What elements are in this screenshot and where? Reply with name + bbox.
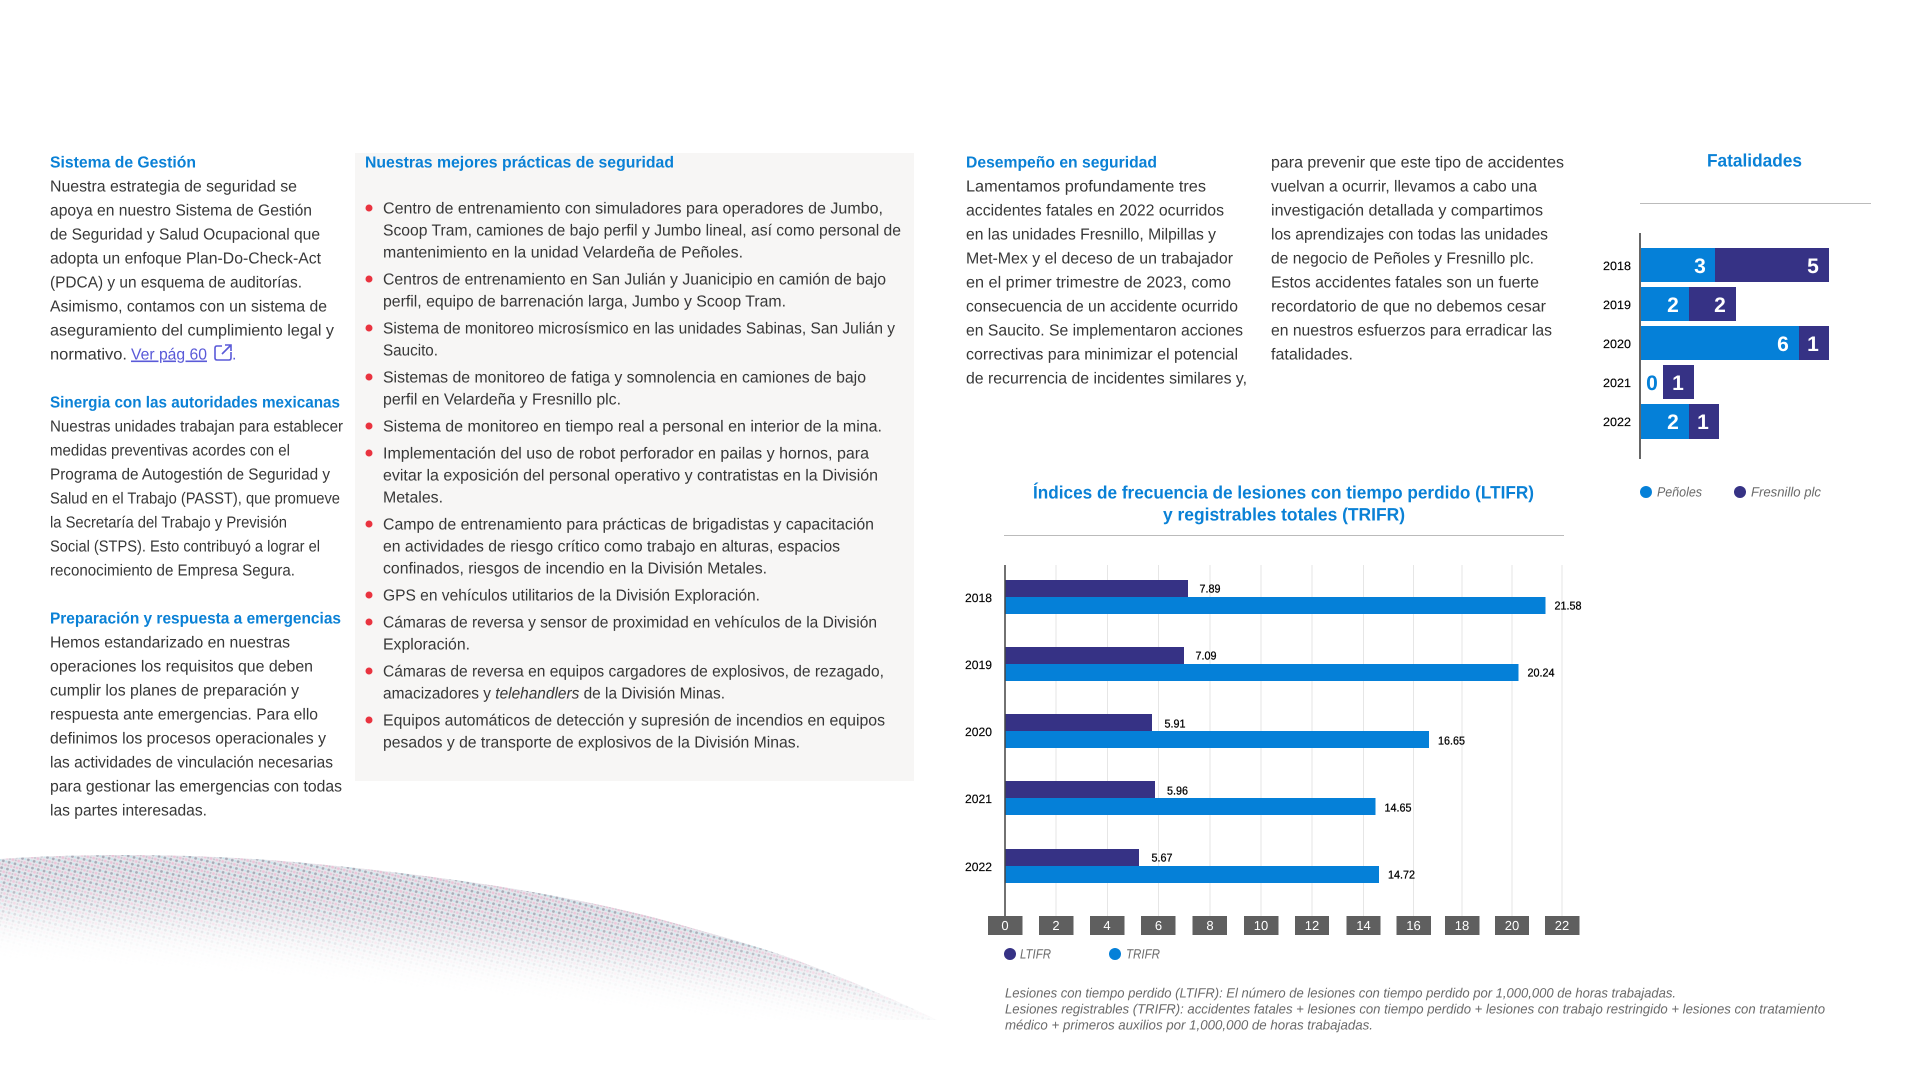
- legend: TRIFR: [1109, 947, 1160, 962]
- x axis tick boxes: 14: [1356, 918, 1371, 933]
- text block: Preparación y respuesta a emergencias: definimos los procesos operacionales y: [50, 730, 326, 748]
- bars 2022: [965, 849, 1415, 883]
- heading: Desempeño en seguridad: Desempeño en seguridad: [966, 154, 1157, 172]
- panel: best practices background: [355, 153, 914, 781]
- text block: Desempeño continuation: investigación detallada y compartimos: [1271, 202, 1543, 220]
- list item 6: evitar la exposición del personal operativo y contratistas en la División: [383, 468, 878, 484]
- text block: Sistema de Gestión: apoya en nuestro Sistema de Gestión: [50, 202, 312, 220]
- icon: external link: [215, 345, 231, 360]
- bars 2020: 5.91: [1164, 718, 1186, 730]
- row 2022: 2: [1667, 411, 1679, 434]
- bars 2019: 7.09: [1196, 650, 1216, 662]
- text block: Desempeño en seguridad: en el primer trimestre de 2023, como: [966, 274, 1231, 292]
- row 2019: [1603, 287, 1736, 321]
- bars 2021: 2021: [965, 792, 992, 806]
- legend: TRIFR: TRIFR: [1126, 947, 1160, 962]
- text block: Sistema de Gestión: [50, 154, 334, 364]
- chart title: [1033, 482, 1534, 524]
- text block: Desempeño en seguridad: consecuencia de un accidente ocurrido: [966, 298, 1238, 316]
- x axis tick boxes: 22: [1555, 918, 1569, 933]
- bars 2020: 16.65: [1438, 736, 1465, 748]
- bars 2018: [965, 580, 1582, 614]
- list item 1: Scoop Tram, camiones de bajo perfil y Jumbo lineal, así como personal de: [383, 222, 901, 240]
- legend: LTIFR: [1004, 947, 1051, 962]
- bars 2019: [965, 647, 1555, 681]
- row 2020: 6: [1777, 333, 1789, 356]
- x axis tick boxes: 6: [1155, 918, 1162, 933]
- row 2021: 1: [1672, 372, 1684, 395]
- list item 6: Implementación del uso de robot perforador en pailas y hornos, para: [383, 446, 869, 462]
- x axis tick boxes: 16: [1406, 918, 1421, 933]
- text block: Sinergia con las autoridades mexicanas: reconocimiento de Empresa Segura.: [50, 562, 295, 580]
- x axis tick boxes: 18: [1455, 918, 1469, 933]
- text block: Sinergia con las autoridades mexicanas: [50, 394, 344, 580]
- text block: Preparación y respuesta a emergencias: respuesta ante emergencias. Para ello: [50, 706, 318, 724]
- text block: Sistema de Gestión: normativo.: [50, 346, 127, 364]
- bars 2019: 2019: [965, 658, 992, 672]
- row 2018: 5: [1807, 255, 1819, 278]
- text block: Desempeño continuation: [1271, 154, 1564, 364]
- list item 10: Cámaras de reversa en equipos cargadores de explosivos, de rezagado,: [383, 664, 884, 680]
- text block: Sinergia con las autoridades mexicanas: Social (STPS). Esto contribuyó a lograr el: [50, 538, 320, 556]
- link: Ver pág 60: Ver pág 60: [131, 346, 207, 364]
- bars 2018: 7.89: [1200, 584, 1220, 596]
- row 2020: [1603, 326, 1829, 360]
- bullet list: best practices: [366, 200, 901, 752]
- text block: Sinergia con las autoridades mexicanas: Salud en el Trabajo (PASST), que promueve: [50, 490, 340, 508]
- bars 2022: 5.67: [1152, 852, 1172, 864]
- row 2021: 0: [1646, 372, 1658, 395]
- heading: Sinergia: Sinergia con las autoridades mexicanas: [50, 394, 340, 412]
- list item 11: Equipos automáticos de detección y supresión de incendios en equipos: [383, 712, 885, 730]
- bars 2021: 14.65: [1384, 802, 1412, 814]
- x axis tick boxes: 20: [1505, 918, 1519, 933]
- text block: Desempeño continuation: de negocio de Peñoles y Fresnillo plc.: [1271, 250, 1534, 268]
- bars 2020: 2020: [965, 725, 992, 739]
- bars 2021: 5.96: [1167, 786, 1188, 798]
- list item 7: Campo de entrenamiento para prácticas de brigadistas y capacitación: [383, 516, 874, 534]
- text block: Sistema de Gestión: Nuestra estrategia de seguridad se: [50, 178, 297, 196]
- text block: Desempeño continuation: los aprendizajes con todas las unidades: [1271, 226, 1548, 244]
- chart title: Fatalidades: Fatalidades: [1707, 150, 1802, 170]
- row 2018: 2018: [1603, 259, 1631, 273]
- list item 5: Sistema de monitoreo en tiempo real a personal en interior de la mina.: [383, 418, 882, 436]
- text block: Sistema de Gestión: adopta un enfoque Plan-Do-Check-Act: [50, 250, 322, 268]
- row 2020: 1: [1807, 333, 1819, 356]
- row 2018: [1603, 248, 1829, 282]
- legend: Peñoles: Peñoles: [1657, 485, 1702, 500]
- list item 2: [366, 272, 886, 310]
- row 2019: 2: [1714, 294, 1726, 317]
- list item 1: Centro de entrenamiento con simuladores para operadores de Jumbo,: [383, 200, 883, 218]
- text block: Desempeño en seguridad: en las unidades Fresnillo, Milpillas y: [966, 226, 1216, 244]
- text block: Sinergia con las autoridades mexicanas: Programa de Autogestión de Seguridad y: [50, 466, 330, 484]
- x axis tick boxes: 12: [1305, 918, 1319, 933]
- text block: Desempeño en seguridad: de recurrencia de incidentes similares y,: [966, 370, 1247, 388]
- text block: Sistema de Gestión: .: [232, 346, 236, 364]
- row 2022: 2022: [1603, 415, 1631, 429]
- list item 4: Sistemas de monitoreo de fatiga y somnolencia en camiones de bajo: [383, 370, 866, 386]
- row 2021: [1603, 365, 1694, 399]
- legend: Fresnillo plc: Fresnillo plc: [1751, 485, 1821, 500]
- x axis tick boxes: 8: [1206, 918, 1214, 933]
- chart title: y registrables totales (TRIFR): [1163, 504, 1405, 524]
- text block: Sistema de Gestión: Asimismo, contamos con un sistema de: [50, 298, 327, 316]
- text block: Sinergia con las autoridades mexicanas: Nuestras unidades trabajan para establecer: [50, 418, 344, 436]
- bars 2022: 2022: [965, 860, 992, 874]
- text block: Desempeño continuation: en nuestros esfuerzos para erradicar las: [1271, 322, 1552, 340]
- bars 2021: [965, 781, 1412, 815]
- text block: Preparación y respuesta a emergencias: operaciones los requisitos que deben: [50, 658, 313, 676]
- list item 7: en actividades de riesgo crítico como trabajo en alturas, espacios: [383, 538, 840, 556]
- text block: Desempeño continuation: Estos accidentes fatales son un fuerte: [1271, 274, 1539, 292]
- list item 2: perfil, equipo de barrenación larga, Jumbo y Scoop Tram.: [383, 294, 786, 310]
- bars 2018: 21.58: [1554, 600, 1582, 612]
- footnote: [1005, 986, 1825, 1033]
- text block: Desempeño en seguridad: [966, 154, 1247, 388]
- text block: Sinergia con las autoridades mexicanas: medidas preventivas acordes con el: [50, 442, 290, 460]
- chart title: Índices de frecuencia de lesiones con tiempo perdido (LTIFR): [1033, 482, 1534, 502]
- text block: Preparación y respuesta a emergencias: cumplir los planes de preparación y: [50, 682, 299, 700]
- text block: Preparación y respuesta a emergencias: para gestionar las emergencias con todas: [50, 778, 342, 796]
- decorative halftone swoosh: [0, 855, 930, 1020]
- row 2020: 2020: [1603, 337, 1631, 351]
- list item 6: [366, 446, 878, 506]
- footnote: Lesiones con tiempo perdido (LTIFR): El número de lesiones con tiempo perdido por 1,000,000 de horas trabajadas.: [1005, 986, 1676, 1001]
- row 2022: [1603, 404, 1719, 439]
- text block: Desempeño continuation: para prevenir que este tipo de accidentes: [1271, 154, 1564, 172]
- x axis tick boxes: [988, 916, 1580, 935]
- list item 4: perfil en Velardeña y Fresnillo plc.: [383, 392, 621, 408]
- text block: Sistema de Gestión: aseguramiento del cumplimiento legal y: [50, 322, 334, 340]
- row 2019: 2019: [1603, 298, 1631, 312]
- text block: Sistema de Gestión: (PDCA) y un esquema de auditorías.: [50, 274, 302, 292]
- list item 4: [366, 370, 866, 408]
- list item 3: [366, 320, 895, 360]
- list item 3: Sistema de monitoreo microsísmico en las unidades Sabinas, San Julián y: [383, 320, 895, 338]
- text block: Preparación y respuesta a emergencias: [50, 610, 342, 820]
- text block: Desempeño continuation: recordatorio de que no debemos cesar: [1271, 298, 1547, 316]
- bars 2019: 20.24: [1528, 668, 1555, 680]
- text block: Sinergia con las autoridades mexicanas: la Secretaría del Trabajo y Previsión: [50, 514, 287, 532]
- text block: Desempeño continuation: vuelvan a ocurrir, llevamos a cabo una: [1271, 178, 1537, 196]
- legend: Peñoles: [1640, 485, 1702, 500]
- footnote: Lesiones registrables (TRIFR): accidentes fatales + lesiones con tiempo perdido + lesiones con trabajo restringido + lesiones con tratamiento: [1005, 1002, 1825, 1017]
- chart: Fatalidades: [1603, 150, 1871, 500]
- x axis tick boxes: 10: [1254, 918, 1268, 933]
- row 2021: 2021: [1603, 376, 1631, 390]
- text block: Preparación y respuesta a emergencias: las actividades de vinculación necesarias: [50, 754, 333, 772]
- x axis tick boxes: 4: [1103, 918, 1111, 933]
- text block: Preparación y respuesta a emergencias: Hemos estandarizado en nuestras: [50, 634, 290, 652]
- heading: Nuestras mejores prácticas de seguridad: Nuestras mejores prácticas de seguridad: [365, 154, 674, 172]
- heading: Sistema de Gestión: Sistema de Gestión: [50, 154, 196, 172]
- x axis tick boxes: 2: [1052, 918, 1060, 933]
- list item 11: [366, 712, 885, 752]
- list item 11: pesados y de transporte de explosivos de la División Minas.: [383, 734, 800, 752]
- text block: Sistema de Gestión: de Seguridad y Salud Ocupacional que: [50, 226, 320, 244]
- bars 2020: [965, 714, 1465, 748]
- row 2018: 3: [1694, 255, 1706, 278]
- text block: Desempeño en seguridad: correctivas para minimizar el potencial: [966, 346, 1238, 364]
- legend: LTIFR: LTIFR: [1020, 947, 1051, 962]
- text block: Desempeño en seguridad: Met-Mex y el deceso de un trabajador: [966, 250, 1234, 268]
- bars 2022: 14.72: [1388, 870, 1415, 882]
- list item 10: [366, 664, 884, 702]
- text block: Desempeño en seguridad: Lamentamos profundamente tres: [966, 178, 1206, 196]
- list item 1: mantenimiento en la unidad Velardeña de Peñoles.: [383, 244, 743, 262]
- list item 7: confinados, riesgos de incendio en la División Metales.: [383, 560, 767, 578]
- text block: Desempeño continuation: fatalidades.: [1271, 346, 1353, 364]
- list item 3: Saucito.: [383, 342, 438, 360]
- footnote: médico + primeros auxilios por 1,000,000 de horas trabajadas.: [1005, 1018, 1373, 1033]
- text block: Desempeño en seguridad: accidentes fatales en 2022 ocurridos: [966, 202, 1224, 220]
- x axis tick boxes: 0: [1001, 918, 1009, 933]
- row 2022: 1: [1697, 411, 1709, 434]
- list item 6: Metales.: [383, 490, 443, 506]
- text block: Preparación y respuesta a emergencias: las partes interesadas.: [50, 802, 207, 820]
- text block: Desempeño en seguridad: en Saucito. Se implementaron acciones: [966, 322, 1243, 340]
- heading: Preparación: Preparación y respuesta a emergencias: [50, 610, 341, 628]
- list item 9: [366, 614, 877, 654]
- list item 10: amacizadores y telehandlers de la División Minas.: [383, 686, 725, 702]
- list item 2: Centros de entrenamiento en San Julián y Juanicipio en camión de bajo: [383, 272, 886, 288]
- list item 1: [366, 200, 901, 262]
- list item 8: GPS en vehículos utilitarios de la División Exploración.: [383, 588, 760, 604]
- chart: LTIFR and TRIFR: [965, 482, 1582, 962]
- row 2019: 2: [1667, 294, 1679, 317]
- bars 2018: 2018: [965, 591, 992, 605]
- list item 9: Cámaras de reversa y sensor de proximidad en vehículos de la División: [383, 614, 877, 632]
- list item 7: [366, 516, 874, 578]
- list item 9: Exploración.: [383, 636, 470, 654]
